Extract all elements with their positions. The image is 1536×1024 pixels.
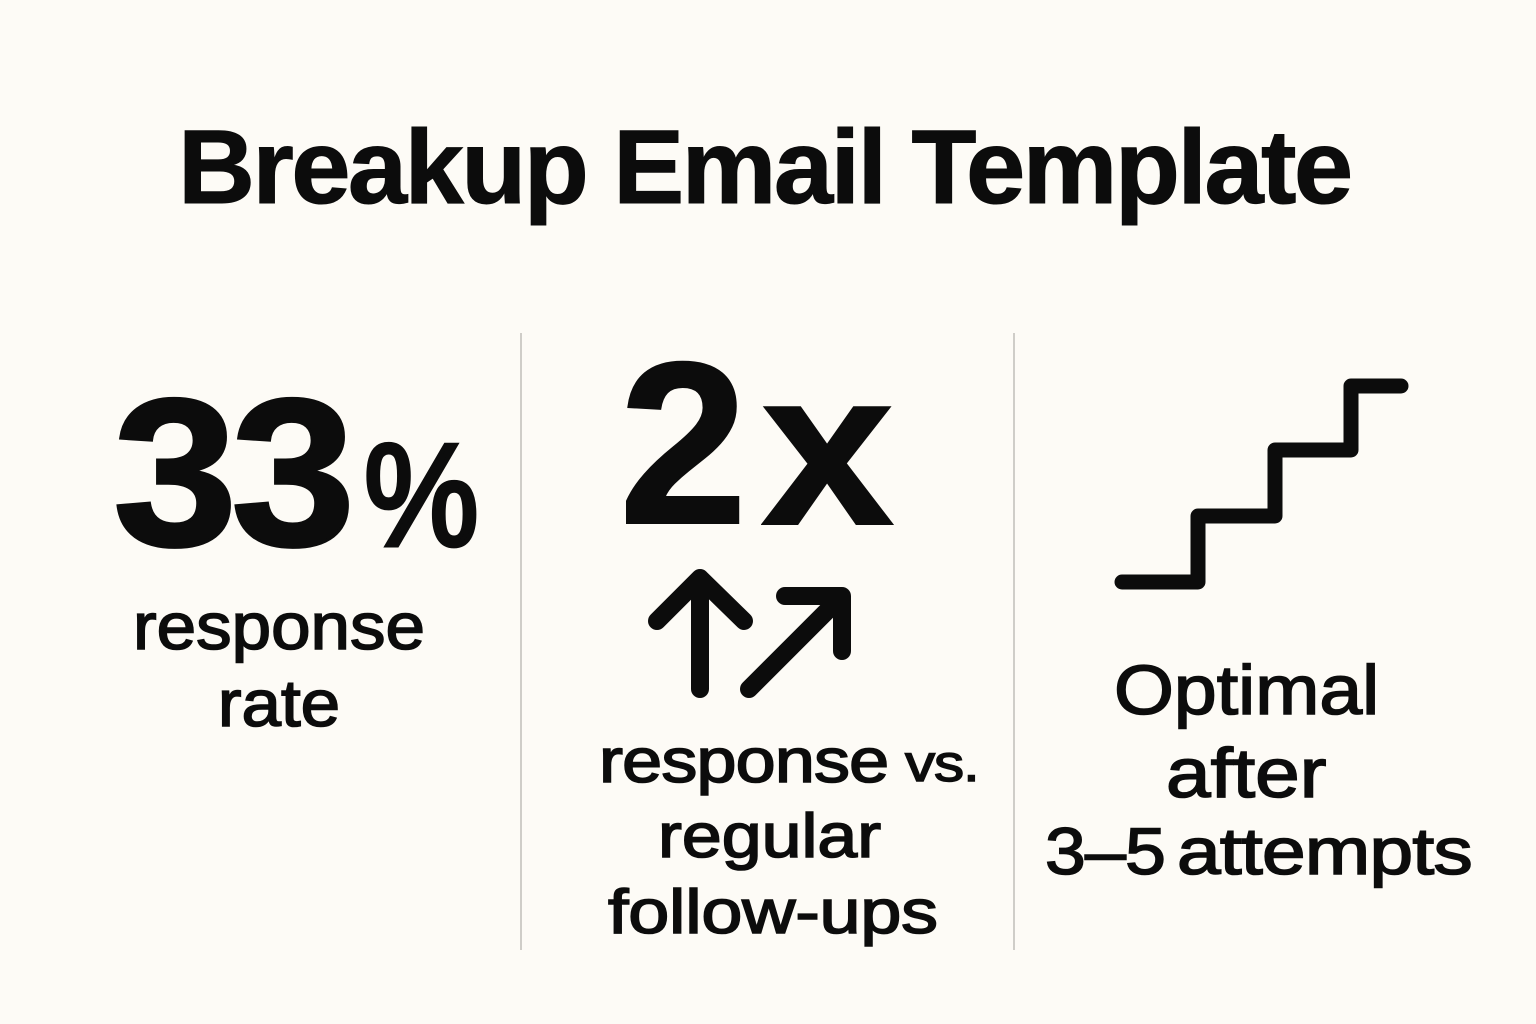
divider left: [520, 333, 522, 950]
stat: 33: 33: [113, 355, 349, 590]
icon: arrows: [648, 569, 851, 698]
stat: 2: 2: [619, 314, 747, 572]
label: response rate: response: [133, 589, 425, 663]
label: attempts: attempts: [1177, 814, 1472, 888]
panel: 2x: [599, 314, 979, 947]
label: response rate: rate: [218, 666, 340, 740]
label: vs.: vs.: [905, 735, 979, 793]
label: regular: regular: [658, 802, 881, 871]
label: 3–5: 3–5: [1045, 814, 1165, 888]
label: response rate: [133, 589, 425, 740]
panel: optimal: [1045, 378, 1472, 888]
label: optimal: Optimal: [1114, 651, 1379, 729]
panel: response rate: [113, 355, 479, 740]
stat: x: x: [761, 324, 894, 571]
label: follow-ups: follow-ups: [608, 878, 938, 947]
divider right: [1013, 333, 1015, 950]
label: response: response: [599, 727, 888, 796]
label: after: after: [1166, 734, 1326, 812]
stat: percent sign: %: [364, 414, 479, 576]
icon: stairs: [1114, 378, 1408, 590]
title: Breakup Email Template: [178, 109, 1351, 226]
